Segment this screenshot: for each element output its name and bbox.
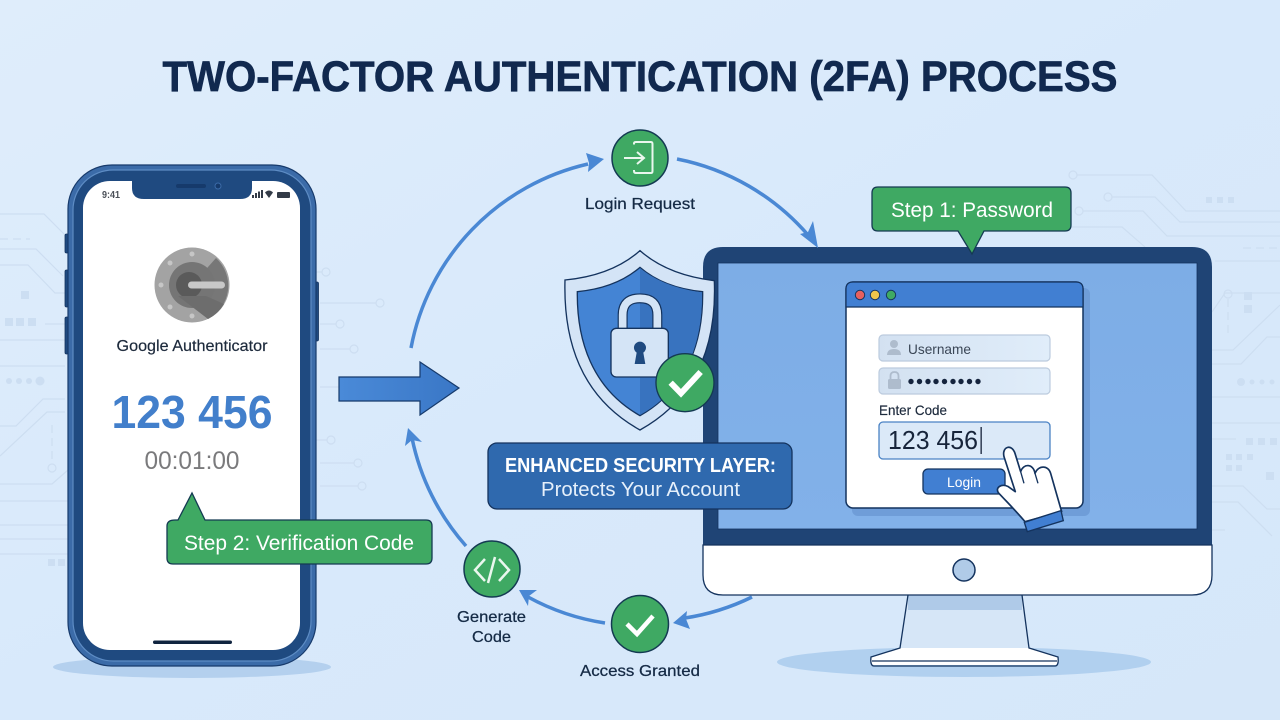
phone notch <box>132 180 252 199</box>
monitor shadow <box>777 647 1151 677</box>
login window <box>846 282 1083 532</box>
monitor screen <box>718 263 1197 529</box>
circuit background dots <box>5 197 1277 566</box>
icon: login door <box>612 130 668 186</box>
monitor frame <box>703 247 1212 545</box>
monitor chin <box>703 545 1212 595</box>
status icons <box>252 190 290 198</box>
cycle arrow: generate code to login request <box>411 153 604 348</box>
callout: step 2 <box>167 493 432 564</box>
circuit background pattern <box>0 171 1280 554</box>
username field: Username <box>908 341 971 357</box>
icon: code brackets <box>464 541 520 597</box>
verification code: 123 456 <box>112 386 272 438</box>
speaker and camera <box>176 183 221 189</box>
shield outer <box>565 251 715 430</box>
title: TWO-FACTOR AUTHENTICATION (2FA) PROCESS <box>162 53 1118 101</box>
label second line: Code <box>472 629 511 646</box>
green check badge <box>656 354 714 412</box>
banner: enhanced security layer <box>488 443 792 509</box>
monitor stand <box>871 595 1058 666</box>
cycle arrow: monitor to access granted <box>673 597 752 629</box>
banner: enhanced security layer: Protects Your Account <box>541 479 740 501</box>
phone <box>65 165 318 666</box>
label: Generate <box>457 609 526 626</box>
label: Access Granted <box>580 663 700 680</box>
callout: step 2: Step 2: Verification Code <box>184 532 414 555</box>
login button: Login <box>947 474 981 490</box>
status time: 9:41 <box>102 190 120 201</box>
phone shadow <box>53 656 331 678</box>
window title bar <box>846 282 1083 307</box>
login button <box>923 469 1005 494</box>
callout: step 1: Step 1: Password <box>891 199 1053 222</box>
code field: 123 456 <box>888 425 978 455</box>
node: login request <box>585 130 696 213</box>
callout: step 1 <box>872 187 1071 254</box>
monitor button <box>953 559 975 581</box>
monitor <box>703 247 1212 666</box>
timer: 00:01:00 <box>144 447 240 475</box>
icon: pointing hand <box>997 447 1063 532</box>
login window shadow <box>852 288 1090 516</box>
username field <box>879 335 1050 361</box>
phone side buttons <box>65 234 318 354</box>
node: access granted <box>580 596 700 680</box>
icon: security shield <box>565 251 715 430</box>
cycle arrow: generate code upward <box>405 428 466 546</box>
node: generate code <box>457 541 526 646</box>
shield right half <box>640 268 702 415</box>
code field <box>879 422 1050 459</box>
window controls <box>855 290 896 300</box>
app name: Google Authenticator <box>116 338 268 355</box>
label: Login Request <box>585 196 696 213</box>
phone body <box>68 165 316 666</box>
phone screen <box>83 181 300 650</box>
password field <box>879 368 1050 394</box>
icon: check mark <box>612 596 668 652</box>
padlock <box>611 298 668 377</box>
phone inner bezel <box>73 170 311 661</box>
cycle arrow: access granted to generate code <box>519 590 605 623</box>
cycle arrow: login request to monitor <box>677 159 818 248</box>
home bar <box>153 640 232 644</box>
big arrow <box>339 362 459 415</box>
banner: enhanced security layer: ENHANCED SECURITY LAYER: <box>505 455 776 477</box>
icon: authenticator logo <box>154 248 230 322</box>
shield inner <box>577 267 703 416</box>
enter code label: Enter Code <box>879 402 947 418</box>
